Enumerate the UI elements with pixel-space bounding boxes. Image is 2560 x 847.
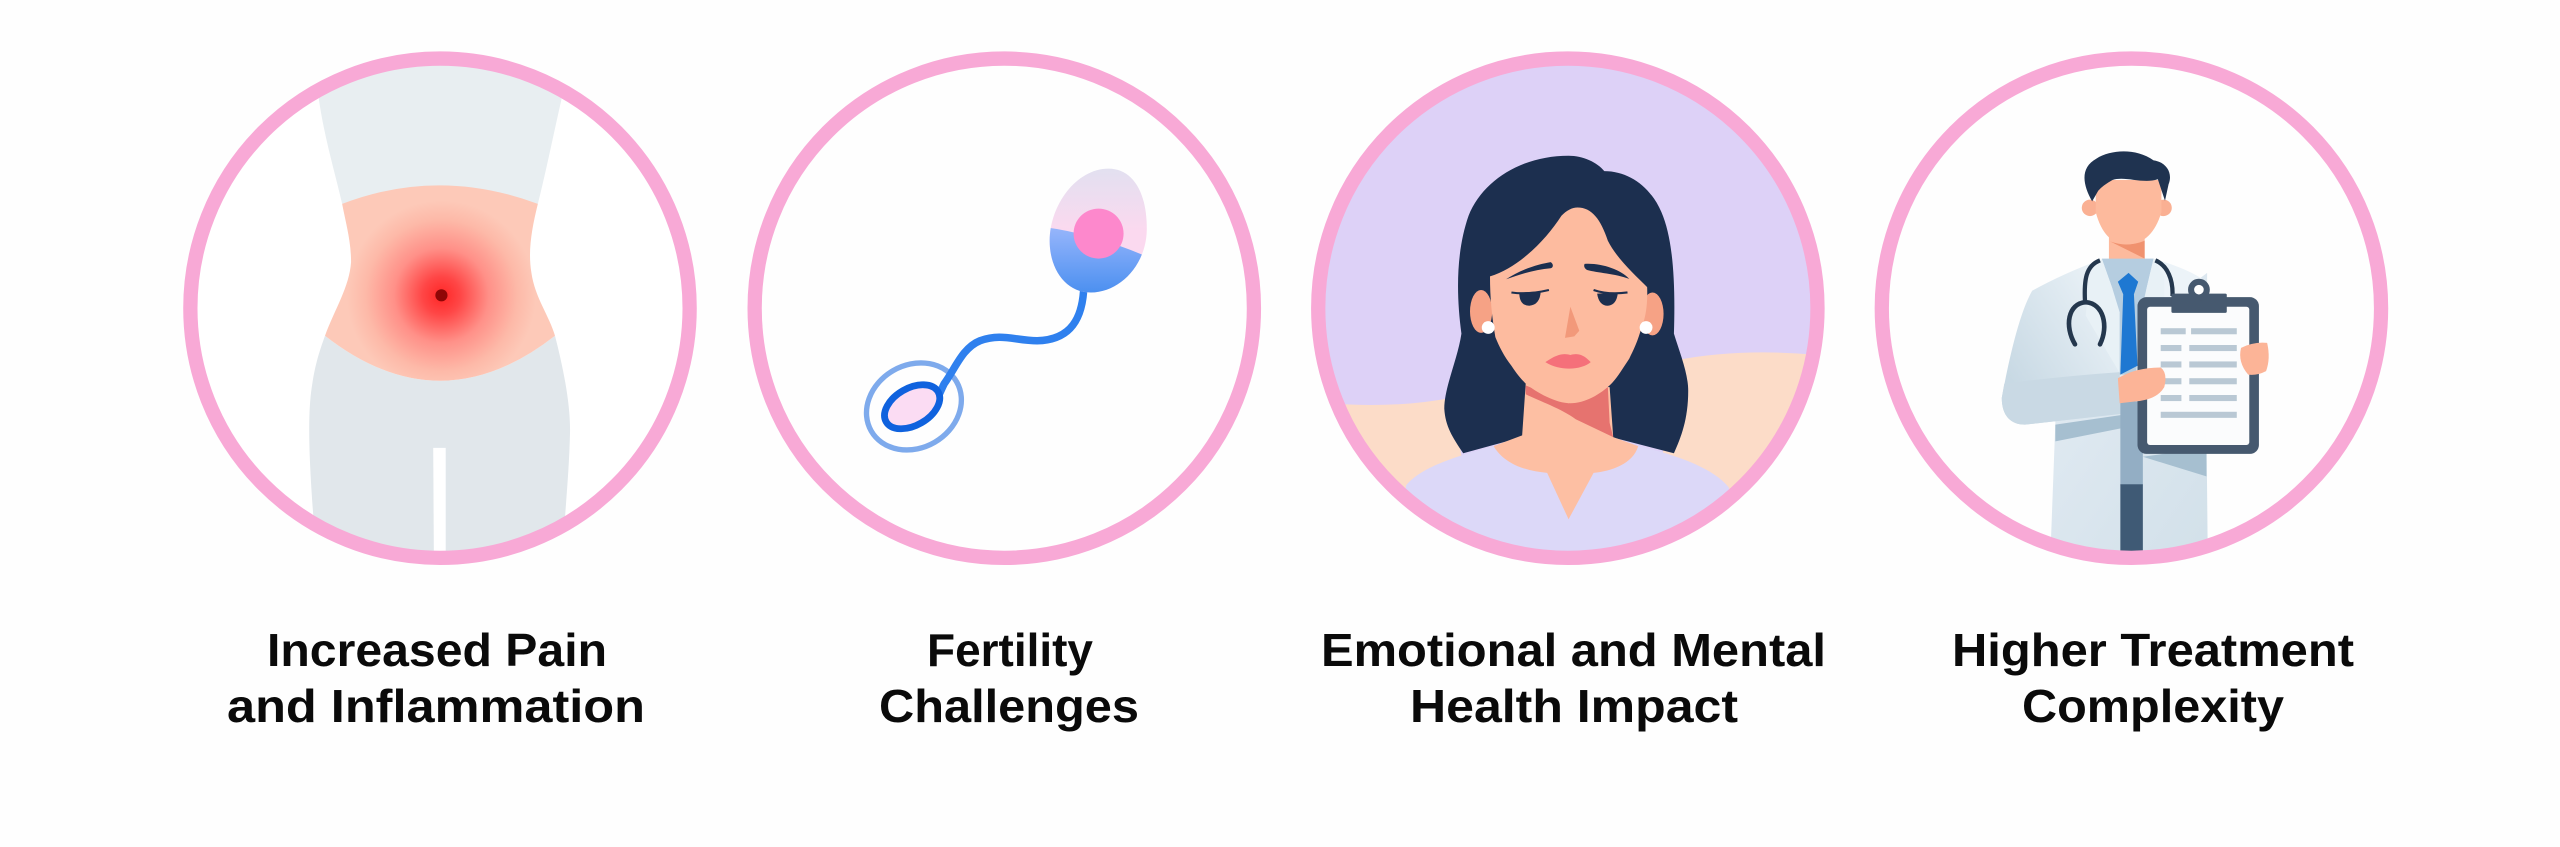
label: Increased Pain and Inflammation: and Inflammation bbox=[227, 680, 645, 732]
ring bbox=[1882, 59, 2381, 558]
label: Fertility Challenges bbox=[879, 624, 1139, 732]
label: Increased Pain and Inflammation: Increased Pain bbox=[267, 624, 607, 676]
label: Emotional and Mental Health Impact: Health Impact bbox=[1410, 680, 1738, 732]
label: Higher Treatment Complexity: Higher Treatment bbox=[1952, 624, 2354, 676]
illustration: abdomen with pain spot bbox=[309, 66, 570, 551]
ring bbox=[1318, 59, 1817, 558]
panel: emotional and mental health impact bbox=[1318, 59, 1819, 566]
panel: higher treatment complexity bbox=[1882, 59, 2381, 566]
label: Higher Treatment Complexity bbox=[1952, 624, 2354, 732]
illustration: egg and sperm cell bbox=[864, 168, 1147, 453]
panel: increased pain and inflammation bbox=[190, 44, 690, 566]
label: Fertility Challenges: Fertility bbox=[927, 624, 1093, 676]
panel: fertility challenges bbox=[755, 59, 1254, 558]
illustration: sad woman bbox=[1323, 64, 1819, 566]
label: Emotional and Mental Health Impact bbox=[1321, 624, 1826, 732]
label: Fertility Challenges: Challenges bbox=[879, 680, 1139, 732]
label: Increased Pain and Inflammation bbox=[227, 624, 645, 732]
ring bbox=[190, 59, 690, 558]
label: Emotional and Mental Health Impact: Emotional and Mental bbox=[1321, 624, 1826, 676]
label: Higher Treatment Complexity: Complexity bbox=[2022, 680, 2284, 732]
illustration: doctor with clipboard bbox=[2002, 151, 2269, 551]
ring bbox=[755, 59, 1254, 558]
infographic canvas bbox=[183, 51, 2388, 732]
